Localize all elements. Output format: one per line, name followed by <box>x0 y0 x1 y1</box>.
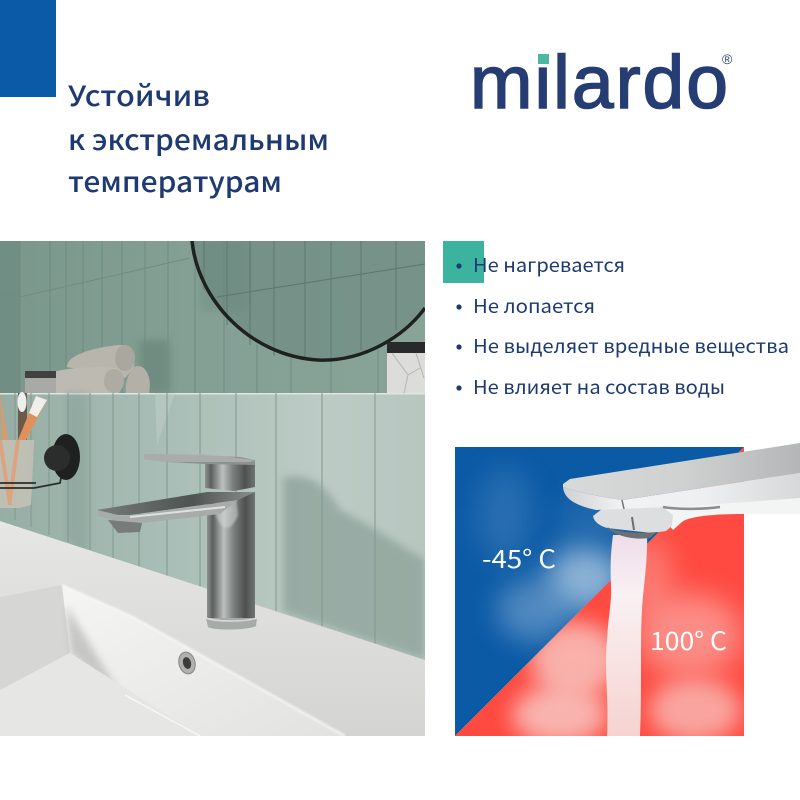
hot temperature label: 100° C <box>650 622 727 658</box>
teal accent square <box>443 241 484 283</box>
registered mark: ® <box>722 51 733 67</box>
suction cup hook <box>44 434 80 480</box>
water stream <box>606 535 647 736</box>
front band <box>563 473 800 510</box>
small jar <box>25 371 56 393</box>
chrome faucet <box>97 454 257 630</box>
marble jar <box>387 342 425 393</box>
aerator <box>593 505 673 533</box>
hot side <box>455 447 744 745</box>
benefit 3: Не выделяет вредные вещества <box>473 332 789 359</box>
overflow drain <box>178 652 196 674</box>
benefits list <box>456 251 789 400</box>
round mirror <box>192 241 425 360</box>
lower wall tiles <box>0 393 425 668</box>
title: к экстремальным <box>68 119 329 159</box>
logo teal dot <box>538 54 549 64</box>
faucet body <box>207 492 255 628</box>
corner blue square <box>0 0 56 97</box>
toothbrush cup and holder <box>0 392 62 508</box>
aerator <box>108 520 142 533</box>
faucet base <box>206 618 257 630</box>
temperature graphic <box>455 443 800 745</box>
benefit 2: Не лопается <box>473 292 595 319</box>
title <box>68 75 329 201</box>
benefit 1: Не нагревается <box>473 251 625 278</box>
milardo logo: milardo <box>470 40 728 124</box>
spout <box>97 492 255 515</box>
cold side <box>455 447 744 736</box>
top face <box>563 443 800 500</box>
handle lever <box>144 454 255 465</box>
upper wall tiles <box>0 241 425 393</box>
bathroom photo panel <box>0 241 425 736</box>
title: Устойчив <box>68 75 210 115</box>
rolled towels <box>54 345 150 393</box>
handle column <box>205 464 255 491</box>
benefit 4: Не влияет на состав воды <box>473 373 725 400</box>
cold temperature label: -45° C <box>482 540 556 576</box>
close-up faucet spout <box>563 443 800 539</box>
title: температурам <box>68 161 282 201</box>
underside <box>660 495 800 530</box>
sink counter and basin <box>0 521 425 736</box>
